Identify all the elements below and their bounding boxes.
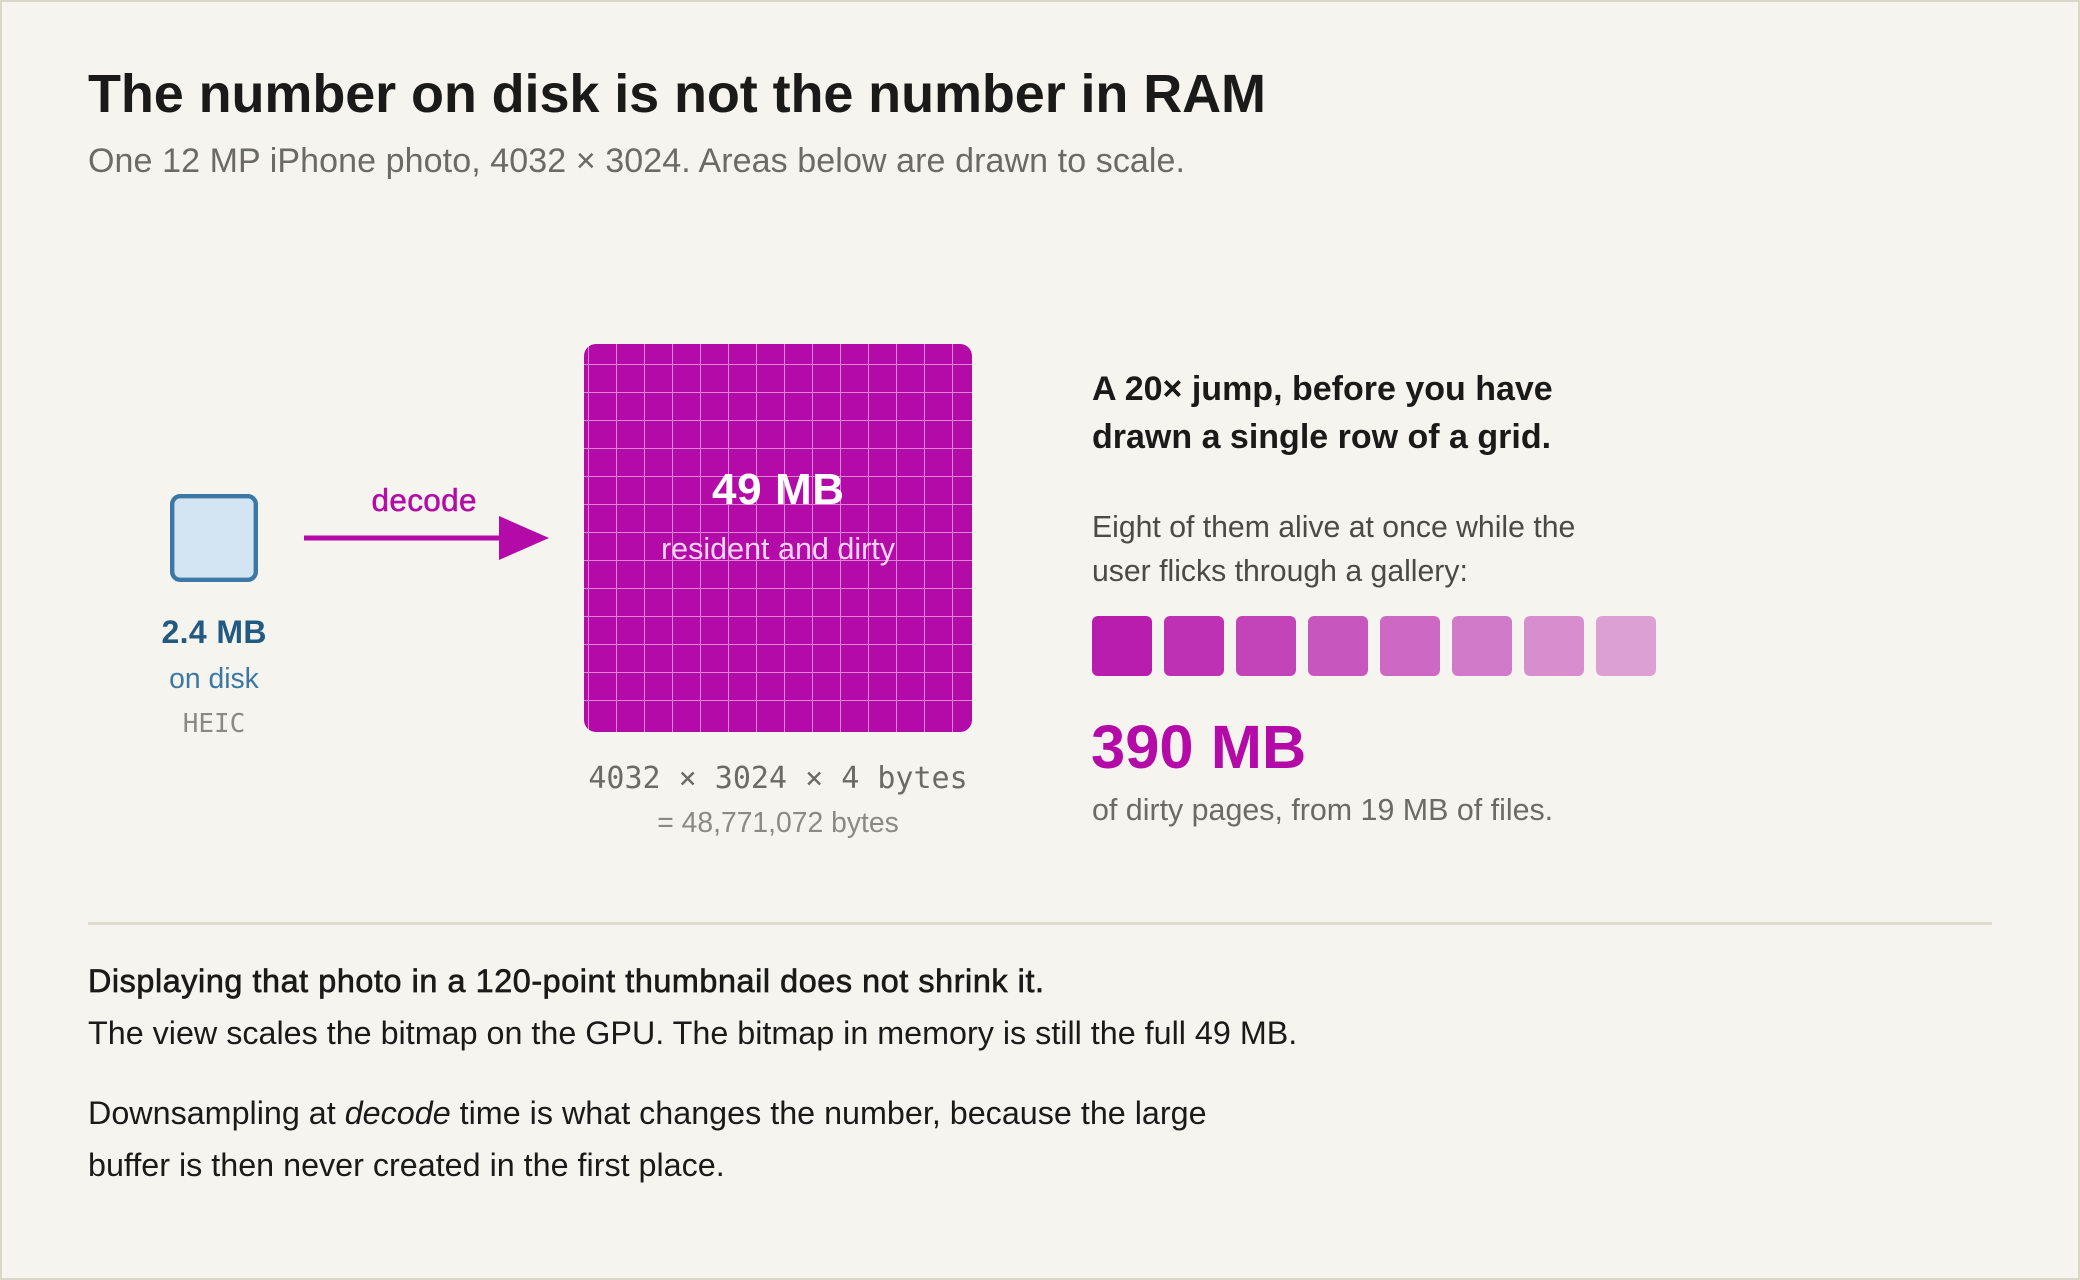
bitmap size value: 49 MB (712, 465, 844, 514)
panel: decoded bitmap (584, 344, 972, 732)
formula result: = 48,771,072 bytes (657, 806, 899, 838)
total value: 390 MB (1091, 713, 1306, 782)
icon: small HEIC file square (172, 496, 256, 580)
bitmap square with page grid (584, 344, 972, 732)
eight bitmap squares (1092, 616, 1656, 676)
file size value: 2.4 MB (162, 614, 266, 650)
title: The number on disk is not the number in RAM (88, 64, 1266, 124)
note: thumbnail body: The view scales the bitmap on the GPU. The bitmap in memory is still the full 49 MB. (88, 1015, 1297, 1051)
arrow: decode (304, 482, 549, 560)
explanation body: Eight of them alive at once while the (1092, 511, 1575, 544)
footer notes (88, 963, 1297, 1183)
bitmap label: resident and dirty (661, 532, 896, 566)
arrow: decode: decode (372, 482, 476, 518)
panel: file on disk (162, 496, 266, 739)
on disk label: on disk (169, 662, 260, 694)
subtitle: One 12 MP iPhone photo, 4032 × 3024. Areas below are drawn to scale. (88, 142, 1185, 180)
note: downsampling: decode time is what changes the number, because the large (345, 1095, 1207, 1131)
panel: explanation (1091, 370, 1656, 827)
format label: HEIC (183, 709, 245, 739)
note: thumbnail heading: Displaying that photo in a 120-point thumbnail does not shrink it. (88, 963, 1044, 999)
explanation heading: A 20× jump, before you have (1092, 370, 1553, 408)
note: downsampling: Downsampling at (88, 1095, 345, 1131)
explanation heading: drawn a single row of a grid. (1092, 418, 1551, 456)
formula: 4032 × 3024 × 4 bytes (588, 761, 968, 796)
explanation body: user flicks through a gallery: (1092, 555, 1468, 588)
total caption: of dirty pages, from 19 MB of files. (1092, 793, 1553, 827)
note: downsampling: buffer is then never created in the first place. (88, 1147, 725, 1183)
